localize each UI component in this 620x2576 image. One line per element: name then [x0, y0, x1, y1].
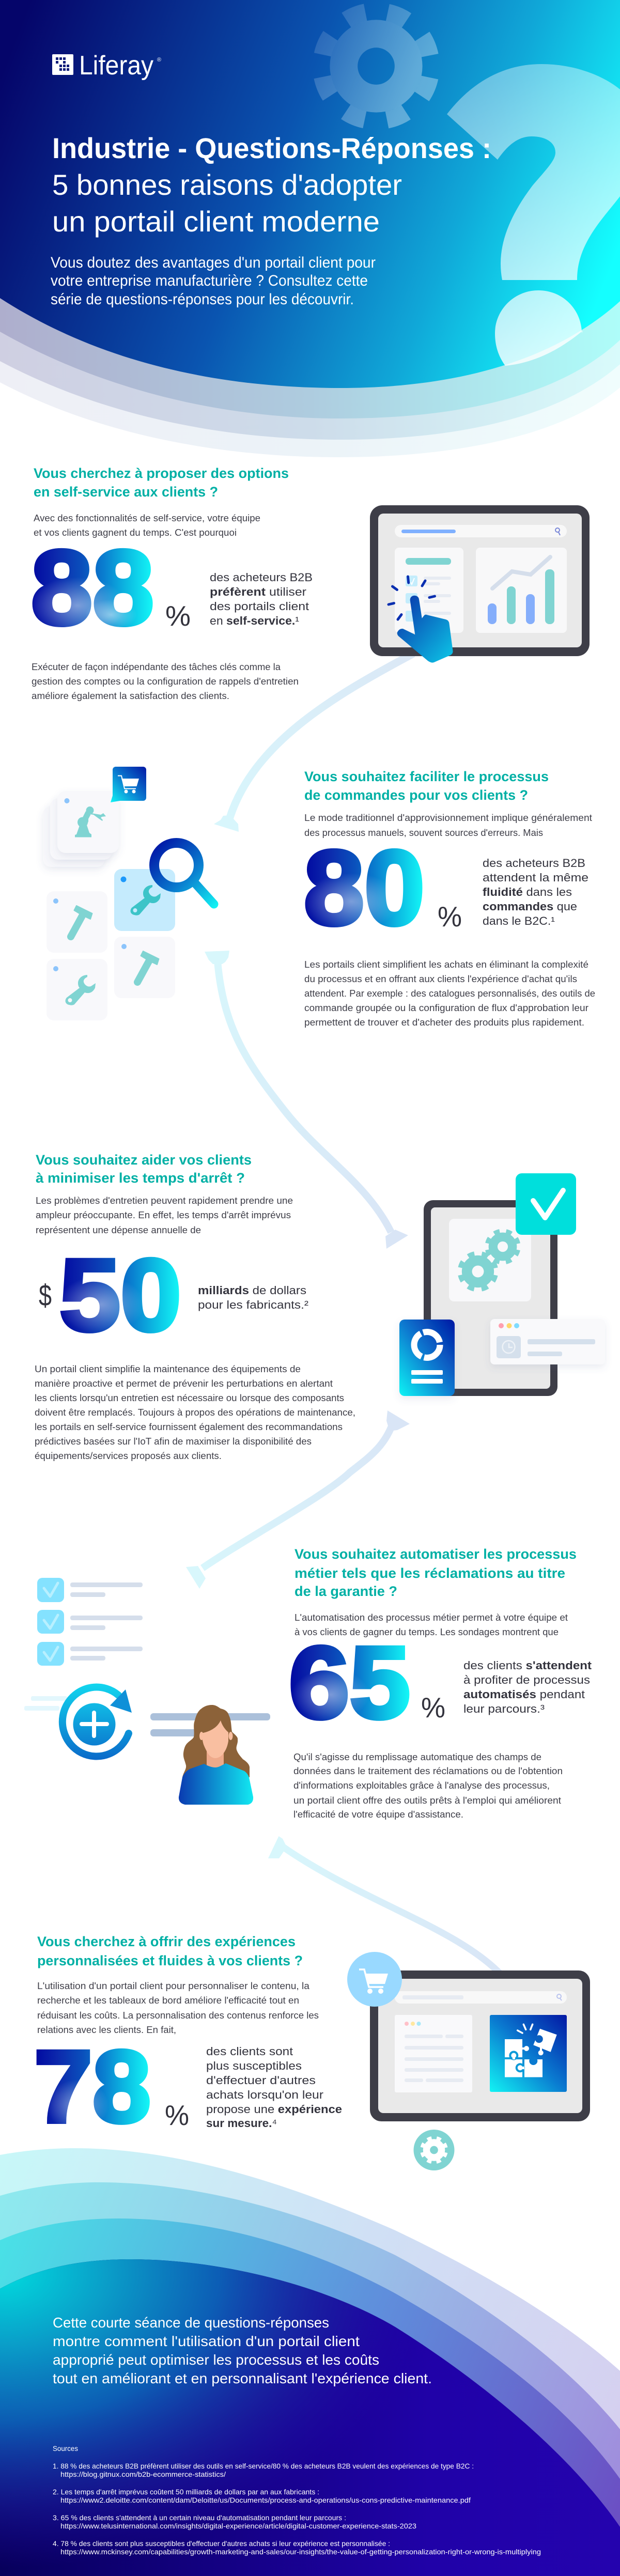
- statistic caption: préfèrent utiliser: [210, 585, 306, 598]
- sources: Sources: [53, 2444, 78, 2453]
- icon: cart circle: [347, 1952, 402, 2007]
- sources: https://www.telusinternational.com/insights/digital-experience/article/digital-customer-experience-stats-2023: [60, 2522, 416, 2530]
- statistic caption: [463, 1659, 592, 1715]
- heading: Vous souhaitez faciliter le processus: [304, 769, 549, 784]
- text block: ampleur préoccupante. En effet, les temps d'arrêt imprévus: [36, 1210, 291, 1220]
- intro text: [51, 254, 376, 308]
- arrow: section 4 to section 5: [268, 1836, 500, 1974]
- illustration: personalised portal tablet: [347, 1952, 590, 2170]
- text block: prédictives basées sur l'IoT afin de maximiser la disponibilité des: [35, 1436, 312, 1447]
- statistic caption: milliards de dollars: [198, 1284, 306, 1297]
- header panel: [0, 0, 620, 457]
- statistic 88 percent: 88: [31, 529, 154, 647]
- text block: recherche et les tableaux de bord améliore l'efficacité tout en: [37, 1995, 299, 2006]
- text block: permettent de trouver et d'acheter des produits plus rapidement.: [304, 1017, 584, 1028]
- text block: L'utilisation d'un portail client pour personnaliser le contenu, la: [37, 1981, 310, 1991]
- closing statement: approprié peut optimiser les processus et les coûts: [53, 2352, 379, 2368]
- statistic caption: des acheteurs B2B: [210, 571, 313, 584]
- statistic caption: plus susceptibles: [206, 2059, 302, 2072]
- text block: [34, 513, 260, 538]
- arrow: section 3 to section 4: [186, 1410, 410, 1589]
- text block: Qu'il s'agisse du remplissage automatique des champs de: [293, 1752, 541, 1762]
- icon: history panel: [490, 1319, 605, 1364]
- intro text: Vous doutez des avantages d'un portail client pour: [51, 254, 376, 271]
- text block: manière proactive et permet de prévenir les perturbations en alertant: [35, 1378, 333, 1389]
- text block: [293, 1752, 563, 1820]
- text block: [35, 1364, 355, 1461]
- panel: section 1 self-service: [28, 465, 590, 701]
- sources: 4. 78 % des clients sont plus susceptibles d'effectuer d'autres achats si leur expérience est personnalisée :: [53, 2539, 390, 2548]
- heading: en self-service aux clients ?: [34, 484, 218, 500]
- text block: du processus et en offrant aux clients l'expérience d'achat qu'ils: [304, 974, 577, 984]
- heading: [295, 1546, 577, 1599]
- text block: représentent une dépense annuelle de: [36, 1225, 201, 1235]
- statistic caption: [198, 1284, 308, 1311]
- icon: chart card: [399, 1320, 455, 1396]
- statistic 80 percent: 80: [304, 829, 425, 947]
- text block: réduisant les coûts. La personnalisation des contenus renforce les: [37, 2010, 319, 2021]
- icon: gear circle: [413, 2130, 455, 2170]
- statistic 65 percent: 65: [289, 1625, 410, 1740]
- sources: 2. Les temps d'arrêt imprévus coûtent 50 milliards de dollars par an aux fabricants :: [53, 2488, 319, 2496]
- icon: hammer: [137, 951, 159, 982]
- illustration: checklist: [37, 1578, 143, 1666]
- sources: https://www.mckinsey.com/capabilities/growth-marketing-and-sales/our-insights/the-value-of-getting-personalization-right-or-wrong-is-multiplying: [60, 2548, 541, 2556]
- icon: pointing hand: [389, 577, 453, 663]
- statistic caption: pour les fabricants.²: [198, 1298, 308, 1311]
- illustration: woman: [150, 1705, 270, 1805]
- text block: Le mode traditionnel d'approvisionnement implique généralement: [304, 813, 592, 823]
- text block: gestion des comptes ou la configuration de rappels d'entretien: [32, 676, 299, 687]
- text block: [32, 662, 299, 701]
- heading: personnalisées et fluides à vos clients ?: [37, 1953, 303, 1968]
- text block: L'automatisation des processus métier permet à votre équipe et: [295, 1612, 568, 1623]
- icon: robot arm: [75, 806, 106, 837]
- heading: Vous souhaitez automatiser les processus: [295, 1546, 577, 1562]
- intro text: série de questions-réponses pour les découvrir.: [51, 291, 354, 308]
- text block: [36, 1196, 293, 1235]
- icon: decorative gear: [311, 1, 441, 131]
- statistic caption: automatisés pendant: [463, 1688, 585, 1701]
- statistic caption: [210, 571, 313, 627]
- text block: d'informations exploitables grâce à l'analyse des processus,: [293, 1780, 550, 1791]
- heading: de la garantie ?: [295, 1584, 397, 1599]
- statistic caption: propose une expérience: [206, 2103, 342, 2116]
- statistic caption: commandes que: [483, 900, 577, 913]
- statistic caption: [483, 857, 588, 927]
- text block: et vos clients gagnent du temps. C'est pourquoi: [34, 527, 237, 538]
- closing statement: montre comment l'utilisation d'un portail client: [53, 2333, 360, 2349]
- statistic caption: attendent la même: [483, 871, 588, 884]
- heading: à minimiser les temps d'arrêt ?: [36, 1170, 245, 1186]
- icon: cart bubble: [111, 767, 146, 802]
- heading: Vous cherchez à offrir des expériences: [37, 1934, 296, 1949]
- statistic 65 percent: %: [421, 1692, 445, 1724]
- sources: [53, 2444, 541, 2556]
- heading: Vous souhaitez aider vos clients: [36, 1152, 252, 1168]
- statistic 50 billion dollars: 50: [59, 1238, 181, 1352]
- panel: section 3 downtime: [35, 1152, 605, 1461]
- arrow: section 2 to section 3: [205, 951, 408, 1249]
- text block: [37, 1981, 319, 2035]
- icon: large question mark: [447, 64, 620, 366]
- icon: puzzle: [505, 2024, 557, 2077]
- heading: [36, 1152, 252, 1186]
- text block: relations avec les clients. En fait,: [37, 2025, 176, 2035]
- statistic caption: des clients sont: [206, 2045, 293, 2058]
- icon: check tile: [516, 1173, 576, 1235]
- icon: magnifier: [154, 843, 214, 904]
- text block: les portails en self-service fournissent également des recommandations: [35, 1422, 343, 1432]
- title: un portail client moderne: [52, 205, 380, 238]
- icon: gears: [457, 1229, 521, 1292]
- closing statement: Cette courte séance de questions-réponses: [53, 2315, 329, 2331]
- text block: Exécuter de façon indépendante des tâches clés comme la: [32, 662, 281, 672]
- text block: les clients lorsqu'un entretien est nécessaire ou lorsque des composants: [35, 1393, 344, 1403]
- statistic 88 percent: %: [165, 600, 191, 632]
- text block: doivent être remplacés. Toujours à propos des opérations de maintenance,: [35, 1407, 355, 1418]
- closing statement: [53, 2315, 432, 2386]
- sources: 3. 65 % des clients s'attendent à un certain niveau d'automatisation pendant leur parcours :: [53, 2513, 346, 2522]
- title: 5 bonnes raisons d'adopter: [52, 168, 402, 201]
- statistic caption: des clients s'attendent: [463, 1659, 592, 1672]
- illustration: tablet dashboard: [370, 505, 590, 663]
- illustration: catalogue cards: [43, 767, 214, 1020]
- heading: Vous cherchez à proposer des options: [34, 465, 289, 481]
- text block: à vos clients de gagner du temps. Les sondages montrent que: [295, 1627, 559, 1637]
- footer panel background: [0, 2148, 620, 2576]
- heading: de commandes pour vos clients ?: [304, 787, 528, 803]
- illustration: maintenance device: [399, 1173, 605, 1396]
- title: [52, 132, 491, 238]
- logo: Liferay: [79, 51, 153, 81]
- statistic caption: achats lorsqu'on leur: [206, 2088, 323, 2101]
- title: Industrie - Questions-Réponses :: [52, 132, 491, 164]
- sources: https://www2.deloitte.com/content/dam/Deloitte/us/Documents/process-and-operations/us-cons-predictive-maintenance.pdf: [60, 2496, 471, 2504]
- arrow: tablet to section 2: [214, 654, 413, 832]
- text block: améliore également la satisfaction des clients.: [32, 691, 229, 701]
- text block: commande groupée ou la configuration de flux d'approbation leur: [304, 1003, 588, 1013]
- heading: [37, 1934, 303, 1968]
- text block: un portail client offre des outils prêts à l'emploi qui améliorent: [293, 1795, 561, 1806]
- icon: hammer: [71, 906, 92, 937]
- text block: Avec des fonctionnalités de self-service, votre équipe: [34, 513, 260, 523]
- logo: ®: [157, 57, 161, 63]
- heading: métier tels que les réclamations au titre: [295, 1565, 565, 1581]
- text block: l'efficacité de votre équipe d'assistance.: [293, 1809, 463, 1820]
- icon: refresh with plus: [24, 1687, 132, 1757]
- statistic caption: [206, 2045, 342, 2130]
- text block: Les portails client simplifient les achats en éliminant la complexité: [304, 959, 588, 970]
- statistic caption: d'effectuer d'autres: [206, 2074, 316, 2087]
- icon: wrench: [131, 885, 161, 915]
- statistic caption: dans le B2C.¹: [483, 914, 555, 927]
- text block: Un portail client simplifie la maintenance des équipements de: [35, 1364, 301, 1374]
- text block: [304, 813, 592, 838]
- statistic caption: des portails client: [210, 600, 309, 613]
- text block: équipements/services proposés aux clients.: [35, 1451, 222, 1461]
- text block: [295, 1612, 568, 1637]
- heading: [304, 769, 549, 803]
- statistic 78 percent: 78: [34, 2029, 151, 2144]
- statistic caption: des acheteurs B2B: [483, 857, 585, 870]
- text block: Les problèmes d'entretien peuvent rapidement prendre une: [36, 1196, 293, 1206]
- text block: données dans le traitement des réclamations ou de l'obtention: [293, 1766, 563, 1776]
- statistic caption: en self-service. ¹: [210, 614, 299, 627]
- statistic caption: sur mesure.⁴: [206, 2117, 277, 2130]
- sources: https://blog.gitnux.com/b2b-ecommerce-statistics/: [60, 2470, 226, 2478]
- intro text: votre entreprise manufacturière ? Consultez cette: [51, 272, 368, 289]
- text block: [304, 959, 595, 1028]
- panel: section 5 personalisation: [34, 1934, 590, 2170]
- statistic 50 billion dollars: $: [39, 1279, 52, 1312]
- statistic 80 percent: %: [438, 901, 462, 933]
- text block: des processus manuels, souvent sources d'erreurs. Mais: [304, 828, 543, 838]
- statistic 78 percent: %: [165, 2099, 189, 2131]
- closing statement: tout en améliorant et en personnalisant l'expérience client.: [53, 2370, 432, 2386]
- panel: section 2 ordering: [43, 767, 595, 1028]
- sources: 1. 88 % des acheteurs B2B préfèrent utiliser des outils en self-service/80 % des acheteurs B2B veulent des expériences de type B2C :: [53, 2462, 474, 2470]
- statistic caption: leur parcours.³: [463, 1702, 545, 1715]
- text block: attendent. Par exemple : des catalogues personnalisés, des outils de: [304, 988, 595, 999]
- statistic caption: à profiter de processus: [463, 1673, 590, 1686]
- icon: wrench: [66, 975, 96, 1005]
- panel: section 4 automation: [24, 1546, 592, 1820]
- heading: [34, 465, 289, 500]
- statistic caption: fluidité dans les: [483, 886, 572, 898]
